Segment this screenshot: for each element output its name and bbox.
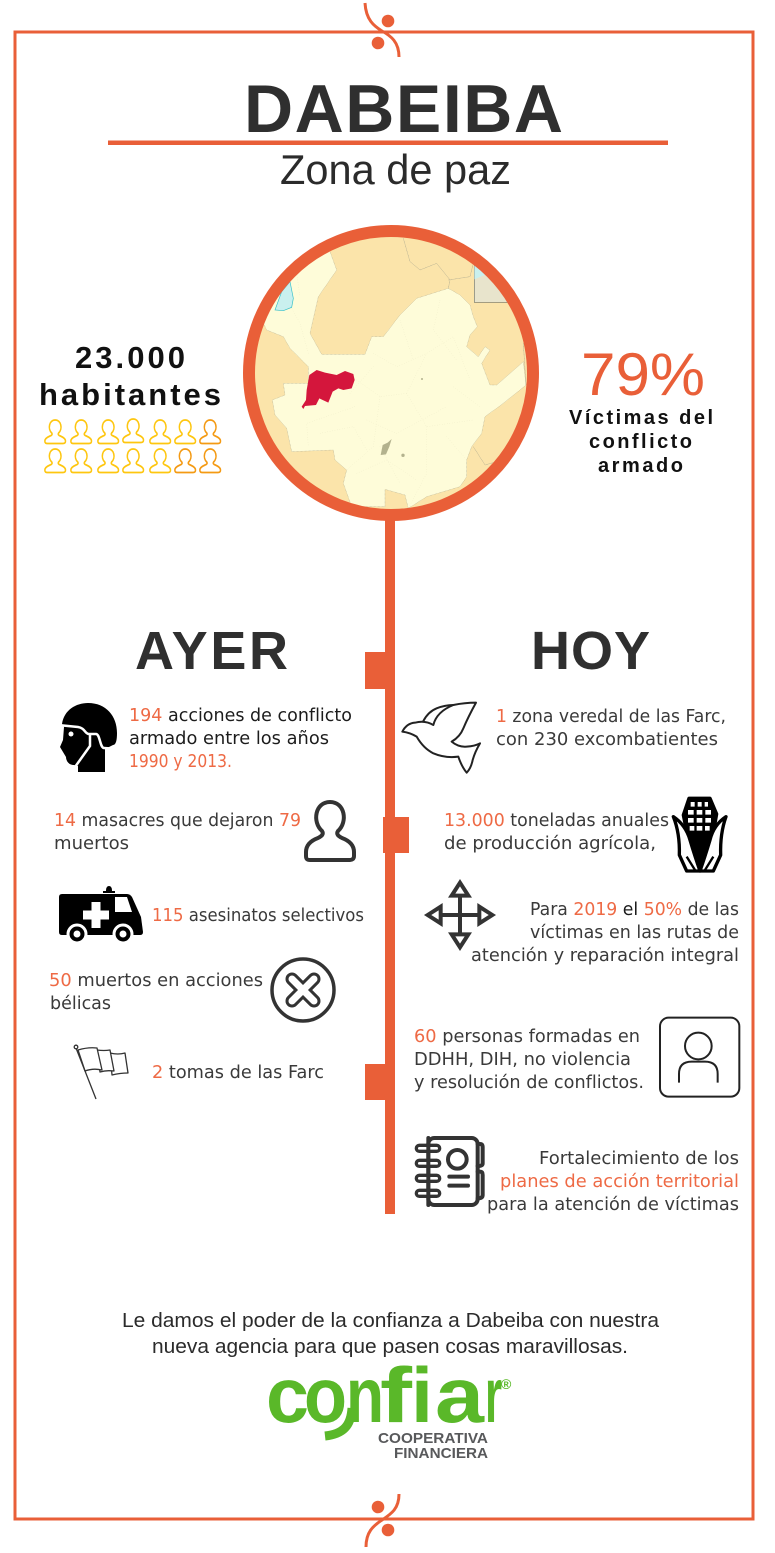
logo: confiar: ® <box>501 1376 512 1392</box>
text: personas formadas: y resolución de conflictos. <box>414 1073 644 1093</box>
text: toneladas: 13.000 toneladas anuales <box>444 811 669 831</box>
logo: confiar: r <box>485 1351 502 1439</box>
closing statement: Le damos el poder de la confianza a Dabeiba con nuestra <box>122 1310 660 1332</box>
text: zona veredal: con 230 excombatientes <box>496 730 718 750</box>
victims label: conflicto <box>589 431 692 453</box>
text: zona veredal: 1 zona veredal de las Farc, <box>496 707 726 727</box>
text: muertos en acciones <box>49 971 263 1014</box>
logo: confiar: i <box>411 1351 433 1439</box>
logo: confiar <box>266 1351 512 1462</box>
victims percentage: 79% <box>581 341 705 408</box>
bottom ornament <box>366 1494 399 1547</box>
text: personas formadas: DDHH, DIH, no violencia <box>414 1050 631 1070</box>
logo: confiar: COOPERATIVA <box>378 1430 488 1447</box>
text: rutas de atención <box>471 900 739 966</box>
heading: ayer: AYER <box>135 621 288 681</box>
text: acciones de conflicto: 1990 y 2013. <box>129 752 232 772</box>
icon row: people bottom <box>45 449 220 472</box>
icon: flag <box>74 1045 128 1099</box>
icon: user in box <box>660 1018 739 1097</box>
icon row: people top <box>45 419 220 444</box>
icon: person <box>306 802 354 860</box>
logo: confiar: c <box>266 1351 309 1439</box>
text: tomas: 2 tomas de las Farc <box>152 1063 324 1083</box>
text: asesinatos: 115 asesinatos selectivos <box>152 906 364 926</box>
title underline <box>108 140 668 145</box>
heading: hoy: HOY <box>531 621 650 681</box>
victims label <box>569 407 713 477</box>
text: rutas de atención: víctimas en las rutas de <box>530 923 739 943</box>
text: acciones de conflicto <box>129 706 352 772</box>
text: masacres: muertos <box>54 834 129 854</box>
victims label: Víctimas del <box>569 407 713 429</box>
icon: cross in circle <box>272 959 334 1021</box>
population label: habitantes <box>39 377 221 412</box>
map of Antioquia <box>240 220 545 525</box>
timeline <box>365 518 409 1214</box>
text: fortalecimiento: planes de acción territorial <box>500 1172 739 1192</box>
subtitle: Zona de paz <box>280 146 511 193</box>
icon: corn <box>673 798 726 871</box>
text: toneladas: de producción agrícola, <box>444 834 656 854</box>
text: toneladas <box>444 811 669 854</box>
closing statement: nueva agencia para que pasen cosas maravillosas. <box>152 1336 628 1358</box>
victims label: armado <box>598 455 683 477</box>
text: rutas de atención: atención y reparación integral <box>471 946 739 966</box>
text: fortalecimiento: Fortalecimiento de los <box>539 1149 739 1169</box>
icon: dove <box>402 703 480 773</box>
logo: confiar: FINANCIERA <box>394 1445 488 1462</box>
icon: soldier helmet <box>58 703 118 772</box>
population figure: 23.000 <box>75 340 185 375</box>
closing statement <box>122 1310 660 1358</box>
logo: confiar: a <box>435 1351 485 1439</box>
icon: four-way arrows <box>428 883 492 947</box>
top ornament <box>365 3 399 57</box>
text: muertos en acciones: 50 muertos en acciones <box>49 971 263 991</box>
text: fortalecimiento <box>487 1149 739 1215</box>
text: fortalecimiento: para la atención de víctimas <box>487 1195 739 1215</box>
text: rutas de atención: Para 2019 el 50% de las <box>530 900 739 920</box>
text: masacres: 14 masacres que dejaron 79 <box>54 811 301 831</box>
text: masacres <box>54 811 301 854</box>
logo: confiar: f <box>380 1351 413 1439</box>
logo: confiar: n <box>346 1351 384 1439</box>
icon: ambulance <box>59 886 143 943</box>
text: personas formadas <box>414 1027 644 1093</box>
text: personas formadas: 60 personas formadas en <box>414 1027 640 1047</box>
text: acciones de conflicto: armado entre los años <box>129 729 329 749</box>
title: DABEIBA <box>244 71 563 147</box>
logo: confiar: o <box>304 1351 347 1439</box>
text: muertos en acciones: bélicas <box>50 994 111 1014</box>
icon: notebook <box>419 1138 483 1205</box>
text: zona veredal <box>496 707 726 750</box>
text: acciones de conflicto: 194 acciones de conflicto <box>129 706 352 726</box>
